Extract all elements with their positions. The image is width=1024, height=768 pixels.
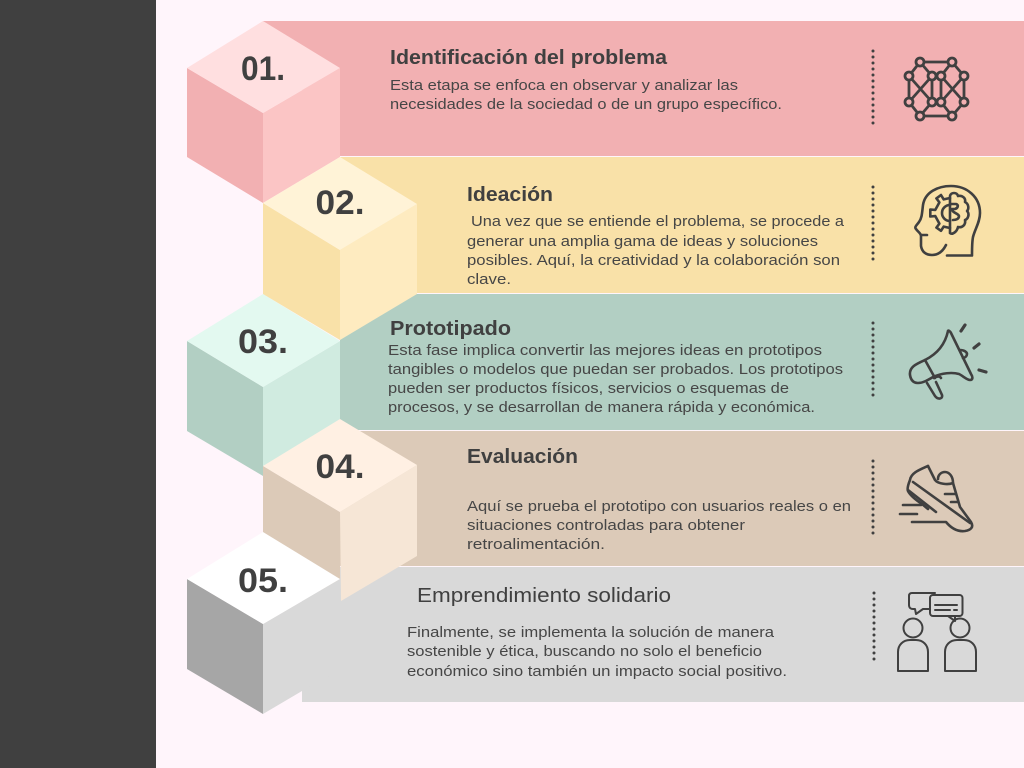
cube: step 3 (187, 294, 340, 476)
dotted dividers (873, 51, 874, 665)
number 02: 02. (316, 184, 364, 222)
description: step 2: posibles. Aquí, la creatividad y la colaboración son (467, 253, 840, 269)
icon: network (905, 58, 968, 120)
description: step 1: necesidades de la sociedad o de un grupo específico. (390, 97, 782, 113)
panel: step 2 band (340, 157, 1024, 293)
panel: step 3 band (340, 294, 1024, 430)
panel: step 4 band (340, 431, 1024, 566)
description: step 2: Una vez que se entiende el problema, se procede a (471, 214, 845, 230)
cube: step 2 (263, 157, 417, 340)
dark sidebar (0, 0, 156, 768)
text block: step 1 (390, 47, 782, 113)
description: step 5: sostenible y ética, buscando no solo el beneficio (407, 644, 762, 660)
description: step 5: económico sino también un impacto social positivo. (407, 664, 787, 680)
cube: step 4 (263, 419, 417, 601)
description: step 2: clave. (467, 272, 511, 288)
heading: step 5: Emprendimiento solidario (417, 585, 671, 607)
text block: step 2 (467, 184, 845, 288)
text block: step 4 (467, 446, 851, 553)
number 01: 01. (241, 50, 285, 88)
heading: step 2: Ideación (467, 184, 553, 206)
description: step 3: tangibles o modelos que puedan ser probados. Los prototipos (388, 362, 843, 378)
description: step 3: Esta fase implica convertir las mejores ideas en prototipos (388, 343, 822, 359)
number 03: 03. (238, 323, 288, 361)
heading: step 3: Prototipado (390, 318, 511, 340)
cube: step 5 (187, 532, 340, 714)
description: step 1: Esta etapa se enfoca en observar y analizar las (390, 78, 738, 94)
icon: megaphone (910, 325, 986, 399)
description: step 3: pueden ser productos físicos, servicios o esquemas de (388, 381, 789, 397)
text block: step 5 (407, 585, 787, 680)
icon: two people talking (898, 593, 976, 671)
description: step 4: retroalimentación. (467, 537, 605, 553)
text block: step 3 (388, 318, 843, 416)
icon: running shoe (900, 466, 972, 531)
cube: step 1 (187, 21, 340, 203)
description: step 4: Aquí se prueba el prototipo con usuarios reales o en (467, 499, 851, 515)
number 04: 04. (316, 448, 364, 486)
description: step 4: situaciones controladas para obtener (467, 518, 745, 534)
heading: step 1: Identificación del problema (390, 47, 668, 69)
description: step 3: procesos, y se desarrollan de manera rápida y económica. (388, 400, 815, 416)
icon: head with gear and brain (915, 186, 980, 256)
description: step 5: Finalmente, se implementa la solución de manera (407, 625, 775, 641)
description: step 2: generar una amplia gama de ideas y soluciones (467, 234, 818, 250)
panel: step 5 band (302, 567, 1024, 702)
number 05: 05. (238, 562, 288, 600)
heading: step 4: Evaluación (467, 446, 578, 468)
panel: step 1 band (263, 21, 1024, 156)
